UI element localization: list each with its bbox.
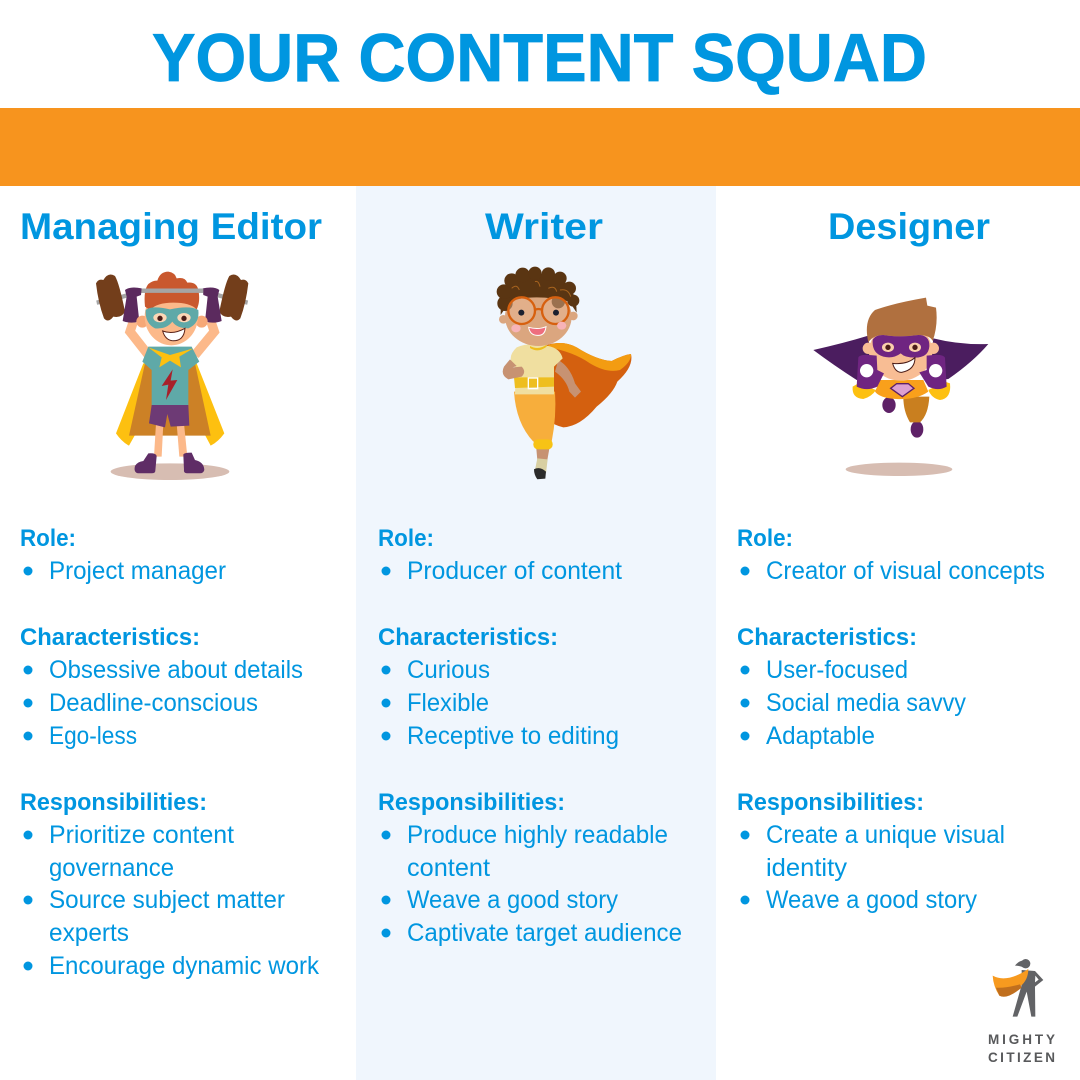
orange banner — [0, 108, 1080, 186]
logo: mighty citizen — [988, 959, 1055, 1065]
section: responsibilities: Create a unique visual — [766, 821, 1005, 849]
section: characteristics: Receptive to editing — [407, 722, 619, 750]
heading: designer: Designer — [828, 206, 990, 247]
section: responsibilities: content — [407, 854, 490, 882]
illustration: hero running with glasses — [497, 267, 631, 479]
section: role — [378, 525, 622, 585]
section: characteristics: Obsessive about details — [49, 656, 303, 684]
section: responsibilities — [378, 789, 682, 947]
section: characteristics: Curious — [407, 656, 490, 684]
section: characteristics: Ego-less — [49, 722, 137, 750]
section: responsibilities — [737, 789, 1005, 914]
section: characteristics: Flexible — [407, 689, 489, 717]
section: characteristics: Characteristics: — [737, 624, 917, 651]
section: responsibilities: experts — [49, 919, 129, 947]
section: characteristics — [378, 624, 619, 750]
section: role: Creator of visual concepts — [766, 557, 1045, 585]
heading: managing editor: Managing Editor — [20, 206, 322, 247]
icon: caped figure — [993, 959, 1043, 1017]
section: role: Role: — [20, 525, 76, 552]
illustration: hero lifting barbell — [96, 272, 248, 480]
section: responsibilities: Source subject matter — [49, 886, 285, 914]
section: responsibilities: Weave a good story — [407, 886, 618, 914]
title: YOUR CONTENT SQUAD — [152, 20, 927, 96]
section: characteristics — [737, 624, 966, 750]
section: responsibilities: Responsibilities: — [378, 789, 565, 816]
section: responsibilities: governance — [49, 854, 174, 882]
section: responsibilities: Captivate target audience — [407, 919, 682, 947]
section: characteristics: Characteristics: — [378, 624, 558, 651]
heading: writer: Writer — [485, 206, 603, 247]
section: role — [737, 525, 1045, 585]
section: responsibilities: Encourage dynamic work — [49, 952, 319, 980]
illustration: flying hero in purple — [813, 298, 988, 476]
section: responsibilities: Produce highly readable — [407, 821, 668, 849]
panel: managing editor — [20, 206, 322, 980]
section: responsibilities: Responsibilities: — [737, 789, 924, 816]
section: role: Role: — [378, 525, 434, 552]
section: role: Role: — [737, 525, 793, 552]
section: characteristics: Social media savvy — [766, 689, 966, 717]
section: role: Producer of content — [407, 557, 622, 585]
section: responsibilities: Weave a good story — [766, 886, 977, 914]
section: responsibilities: Prioritize content — [49, 821, 234, 849]
section: responsibilities: Responsibilities: — [20, 789, 207, 816]
section: role — [20, 525, 226, 585]
section: characteristics: Deadline-conscious — [49, 689, 258, 717]
section: characteristics: User-focused — [766, 656, 908, 684]
panel: writer — [356, 186, 716, 1080]
section: role: Project manager — [49, 557, 226, 585]
wordmark: MIGHTY — [988, 1032, 1055, 1047]
section: characteristics — [20, 624, 303, 750]
section: responsibilities — [20, 789, 319, 980]
writer column background — [356, 186, 716, 1080]
section: characteristics: Characteristics: — [20, 624, 200, 651]
section: responsibilities: identity — [766, 854, 848, 882]
panel: designer — [737, 206, 1045, 914]
logo: mighty citizen: CITIZEN — [988, 1050, 1055, 1065]
section: characteristics: Adaptable — [766, 722, 875, 750]
